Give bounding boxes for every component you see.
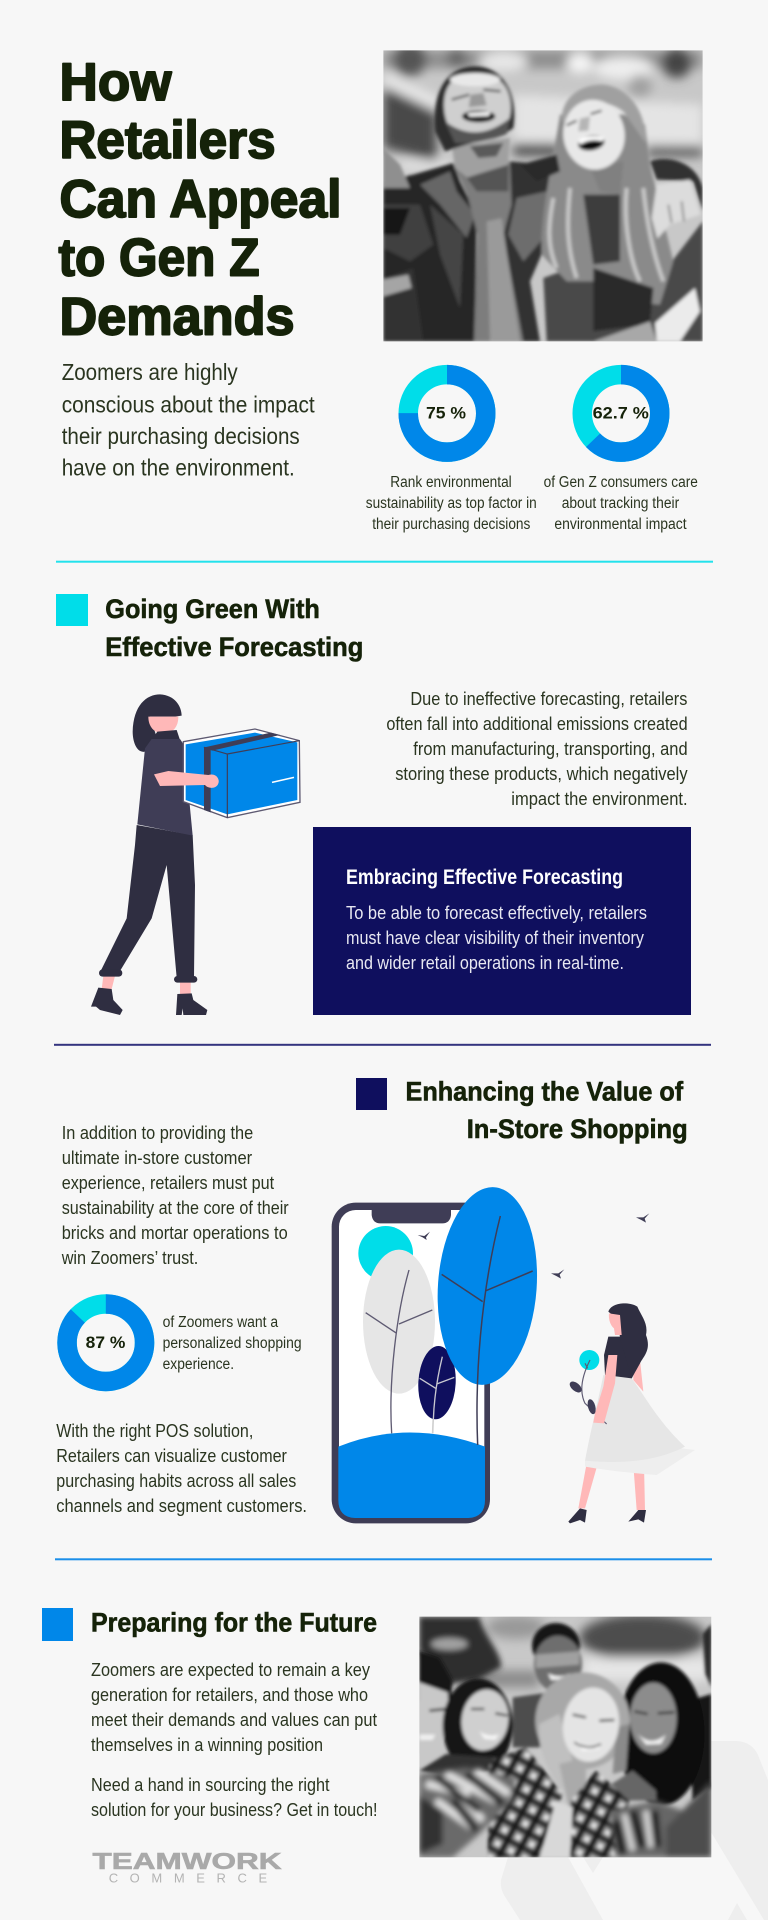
text: in-store intro: ultimate in-store customer bbox=[62, 1147, 252, 1168]
callout: embracing effective forecasting: must have clear visibility of their inventory bbox=[346, 927, 645, 948]
right woman bbox=[618, 1662, 704, 1806]
title: How bbox=[60, 53, 172, 112]
text: POS solution: channels and segment customers. bbox=[56, 1495, 307, 1516]
donut: 87 percent: 87 % bbox=[86, 1333, 125, 1352]
text: future: themselves in a winning position bbox=[91, 1734, 323, 1755]
title: Retailers bbox=[60, 111, 276, 170]
text: in-store intro: sustainability at the core of their bbox=[62, 1197, 289, 1218]
shirt bbox=[488, 1747, 563, 1857]
text: POS solution bbox=[56, 1420, 307, 1516]
text: future: generation for retailers, and those who bbox=[91, 1684, 368, 1705]
left man bbox=[419, 1651, 453, 1711]
heading: in-store shopping bbox=[406, 1077, 688, 1144]
illustration: phone with trees bbox=[332, 1184, 543, 1523]
panel: in-store shopping bbox=[56, 1077, 695, 1523]
caption: 75 percent: sustainability as top factor in bbox=[366, 495, 537, 512]
donut: 62.7 percent bbox=[582, 375, 660, 452]
illustration: woman holding box bbox=[91, 694, 300, 1015]
callout: embracing effective forecasting: Embracing Effective Forecasting bbox=[346, 866, 623, 889]
logo: teamwork commerce: COMMERCE bbox=[109, 1871, 268, 1886]
text: future: Zoomers are expected to remain a key bbox=[91, 1659, 371, 1680]
text: in-store intro: In addition to providing the bbox=[62, 1122, 253, 1143]
man bbox=[383, 163, 477, 341]
panel: background watermark bbox=[501, 1741, 768, 1920]
text: in-store intro: win Zoomers’ trust. bbox=[61, 1247, 198, 1268]
title: Can Appeal bbox=[60, 170, 342, 229]
text: forecasting intro: Due to ineffective forecasting, retailers bbox=[410, 688, 687, 709]
text: POS solution: With the right POS solution, bbox=[56, 1420, 253, 1441]
text: forecasting intro: often fall into additional emissions created bbox=[386, 713, 688, 734]
panel: preparing for the future bbox=[42, 1608, 711, 1886]
text: future: meet their demands and values can put bbox=[91, 1709, 377, 1730]
text: call to action: solution for your business? Get in touch! bbox=[91, 1799, 378, 1820]
caption: 62.7 percent: of Gen Z consumers care bbox=[544, 474, 698, 491]
blonde bbox=[535, 1672, 630, 1769]
caption: 87 percent: experience. bbox=[163, 1356, 234, 1373]
intro text bbox=[62, 359, 315, 481]
intro text: their purchasing decisions bbox=[62, 423, 300, 449]
caption: 75 percent bbox=[366, 474, 537, 533]
title: to Gen Z bbox=[58, 229, 260, 288]
caption: 75 percent: their purchasing decisions bbox=[372, 516, 531, 533]
heading: in-store shopping: In-Store Shopping bbox=[467, 1114, 688, 1144]
donut: 87 percent bbox=[67, 1304, 145, 1381]
callout: embracing effective forecasting: and wider retail operations in real-time. bbox=[346, 952, 624, 973]
donut: 75 percent bbox=[408, 375, 486, 452]
text: forecasting intro: storing these products, which negatively bbox=[395, 763, 688, 784]
photo: group selfie bbox=[419, 1614, 711, 1857]
icon: bird in phone bbox=[418, 1232, 430, 1240]
callout: embracing effective forecasting bbox=[313, 827, 691, 1015]
caption: 62.7 percent bbox=[544, 474, 698, 533]
text: POS solution: Retailers can visualize customer bbox=[56, 1445, 287, 1466]
girl bbox=[443, 1678, 513, 1773]
intro text: Zoomers are highly bbox=[62, 359, 238, 385]
text: POS solution: purchasing habits across all sales bbox=[56, 1470, 296, 1491]
heading: going green bbox=[105, 594, 363, 662]
caption: 75 percent: Rank environmental bbox=[390, 474, 512, 491]
callout: embracing effective forecasting: To be able to forecast effectively, retailers bbox=[346, 902, 647, 923]
text: call to action bbox=[91, 1774, 378, 1820]
text: forecasting intro: from manufacturing, transporting, and bbox=[413, 738, 688, 759]
title bbox=[58, 53, 342, 346]
hat bbox=[435, 66, 514, 151]
caption: 87 percent bbox=[163, 1314, 302, 1373]
text: forecasting intro bbox=[386, 688, 688, 809]
icon: blue square bbox=[42, 1608, 73, 1641]
intro text: conscious about the impact bbox=[62, 392, 315, 418]
intro text: have on the environment. bbox=[62, 455, 295, 481]
panel: going green bbox=[56, 594, 691, 1015]
caption: 62.7 percent: environmental impact bbox=[554, 516, 687, 533]
donut: 62.7 percent: 62.7 % bbox=[593, 404, 649, 423]
logo: teamwork commerce bbox=[92, 1848, 282, 1886]
illustration: woman with flower and birds bbox=[551, 1213, 695, 1523]
text: in-store intro bbox=[61, 1122, 289, 1268]
heading: going green: Going Green With bbox=[105, 594, 320, 624]
woman bbox=[543, 221, 703, 341]
logo: teamwork commerce: TEAMWORK bbox=[92, 1848, 282, 1874]
heading: in-store shopping: Enhancing the Value of bbox=[406, 1077, 683, 1107]
text: in-store intro: bricks and mortar operations to bbox=[62, 1222, 288, 1243]
back man bbox=[510, 1692, 544, 1750]
panel: header bbox=[58, 43, 703, 533]
text: forecasting intro: impact the environment. bbox=[511, 788, 688, 809]
far right bbox=[703, 1624, 711, 1687]
title: Demands bbox=[60, 287, 294, 346]
text: in-store intro: experience, retailers must put bbox=[62, 1172, 274, 1193]
photo: laughing couple bbox=[383, 43, 703, 341]
caption: 62.7 percent: about tracking their bbox=[562, 495, 679, 512]
caption: 87 percent: personalized shopping bbox=[163, 1335, 302, 1352]
icon: navy square bbox=[356, 1078, 387, 1110]
icon: cyan square bbox=[56, 594, 88, 626]
heading: preparing for the future: Preparing for the Future bbox=[91, 1608, 377, 1638]
caption: 87 percent: of Zoomers want a bbox=[163, 1314, 279, 1331]
text: call to action: Need a hand in sourcing the right bbox=[91, 1774, 330, 1795]
donut: 75 percent: 75 % bbox=[426, 404, 466, 423]
heading: going green: Effective Forecasting bbox=[105, 632, 363, 662]
text: future bbox=[91, 1659, 377, 1755]
